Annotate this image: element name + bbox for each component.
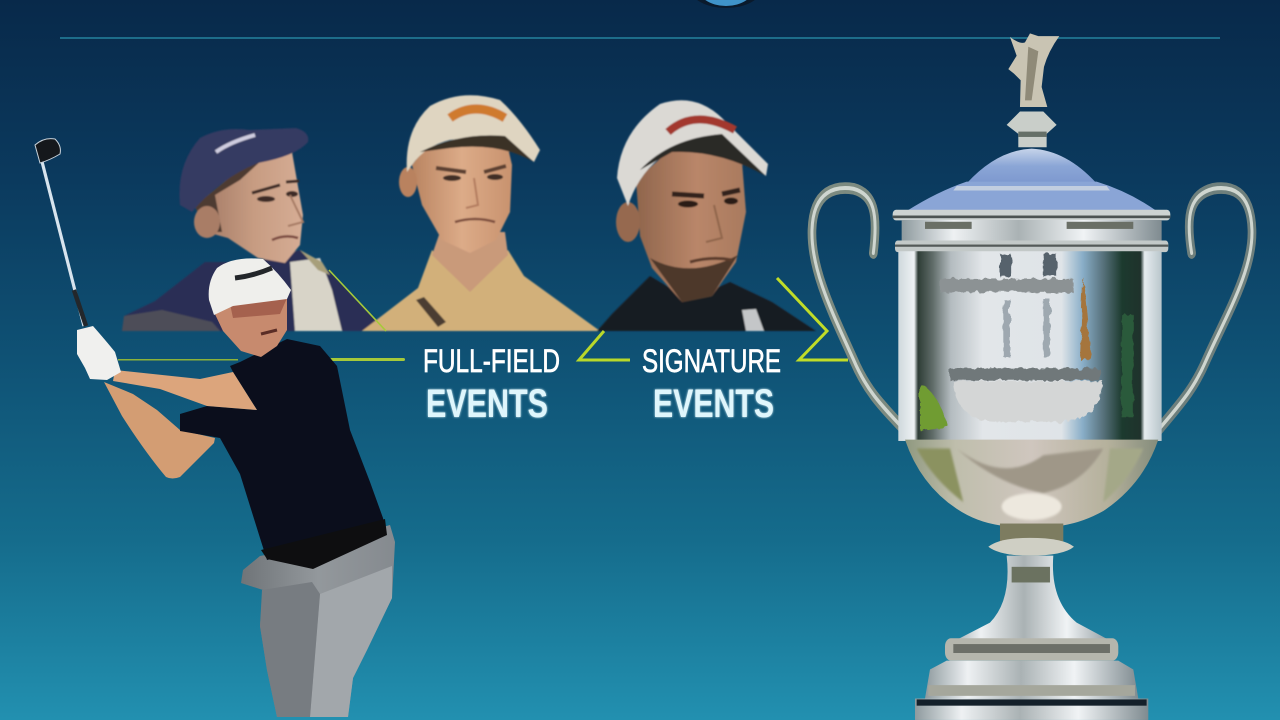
icon: globe fragment at top edge bbox=[690, 0, 762, 8]
trophy rim bands bbox=[893, 210, 1170, 252]
panel: player portraits bbox=[122, 95, 816, 331]
glove bbox=[77, 326, 121, 380]
lime connector line to full-field label bbox=[118, 358, 405, 361]
player portrait 2, cream cap and tan polo bbox=[362, 95, 600, 331]
rear arm bbox=[104, 382, 215, 478]
golfer mid swing bbox=[35, 139, 395, 717]
label: full-field events bbox=[423, 343, 560, 426]
trophy base bbox=[915, 638, 1148, 720]
player portrait 3, white cap and black jacket bbox=[597, 100, 816, 331]
label: full-field events: FULL-FIELD bbox=[423, 343, 560, 379]
trophy cup body bbox=[898, 251, 1162, 441]
trophy lid bbox=[907, 149, 1157, 211]
label: signature events: SIGNATURE bbox=[642, 343, 781, 379]
trophy left handle bbox=[812, 188, 907, 433]
label: full-field events: EVENTS bbox=[426, 382, 548, 426]
belt bbox=[261, 519, 387, 569]
trophy finial figure bbox=[1007, 33, 1059, 147]
lime arrow from portrait strip bbox=[329, 270, 386, 331]
trophy bbox=[812, 33, 1252, 720]
label: signature events: EVENTS bbox=[653, 382, 774, 426]
head and cap bbox=[209, 258, 291, 357]
trophy bowl chasing bbox=[917, 449, 1143, 520]
arrow: second lime chevron bbox=[777, 278, 848, 360]
arrow: first lime chevron bbox=[579, 331, 630, 360]
trophy stem bbox=[947, 524, 1118, 645]
label: signature events bbox=[642, 343, 781, 426]
trophy bowl bbox=[905, 440, 1158, 525]
trousers bbox=[241, 525, 395, 717]
trophy engraved panel bbox=[920, 254, 1133, 431]
trophy right handle bbox=[1156, 188, 1252, 433]
front arm bbox=[113, 370, 257, 410]
shirt bbox=[180, 339, 385, 560]
golf club bbox=[35, 139, 86, 326]
player portrait 1, navy cap bbox=[122, 128, 386, 331]
